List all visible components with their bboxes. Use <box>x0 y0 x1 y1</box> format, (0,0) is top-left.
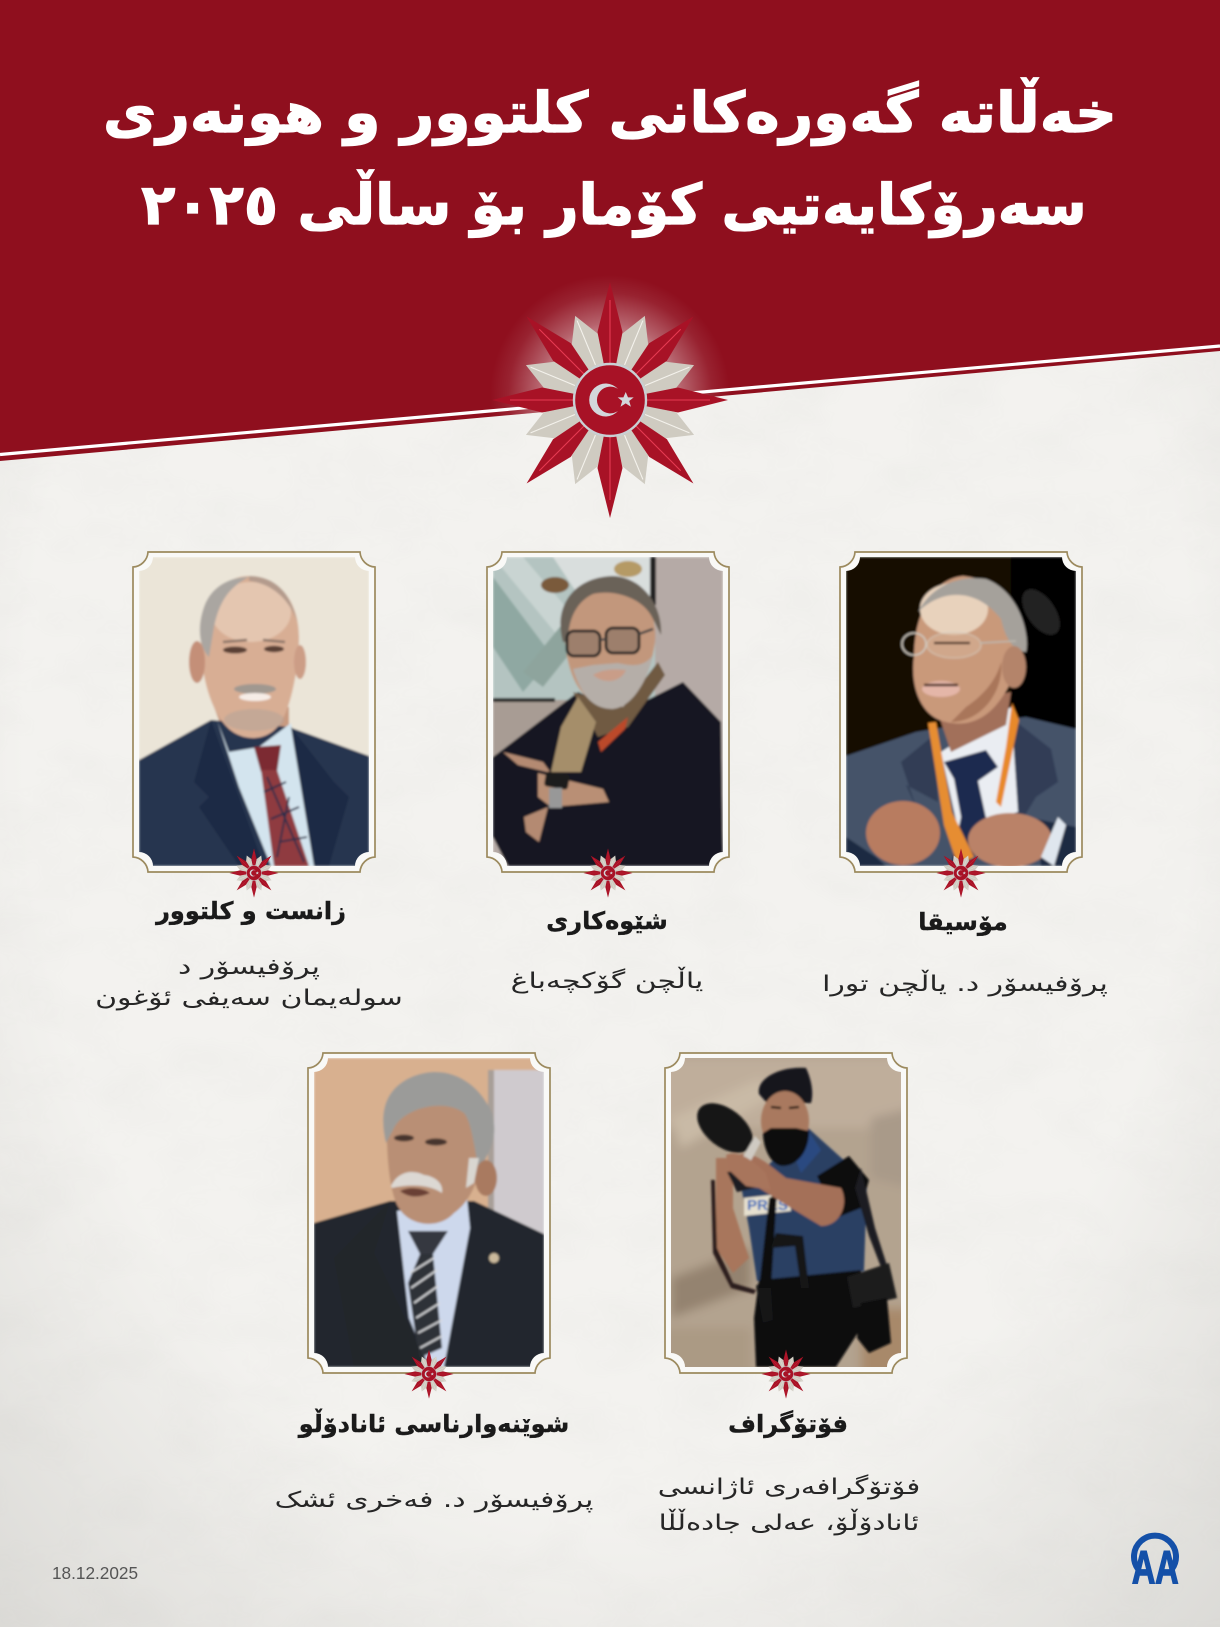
date: 18.12.2025 <box>52 1563 138 1583</box>
names: photography: فۆتۆگرافەری ئاژانسی <box>658 1475 920 1500</box>
panel: painting <box>238 551 730 994</box>
names: music: پرۆفیسۆر د. یاڵچن تورا <box>822 972 1108 997</box>
names: science and culture: سولەیمان سەیفی ئۆغون <box>95 986 403 1011</box>
title <box>103 77 1117 238</box>
names: archaeology: پرۆفیسۆر د. فەخری ئشک <box>275 1488 593 1513</box>
portrait frame: music <box>839 551 1083 898</box>
names: science and culture <box>95 955 403 1011</box>
heading: archaeology: شوێنەوارناسی ئانادۆڵو <box>299 1410 569 1438</box>
heading: photography: فۆتۆگراف <box>728 1410 848 1438</box>
heading: painting: شێوەکاری <box>546 907 668 935</box>
heading: science and culture: زانست و کلتوور <box>156 897 346 925</box>
icon: presidential sun emblem <box>492 283 728 518</box>
panel: photography <box>426 1052 1179 1570</box>
portrait frame: science and culture <box>132 551 376 898</box>
portrait frame: photography <box>664 1052 908 1398</box>
heading: music: مۆسیقا <box>918 908 1008 936</box>
names: photography: ئانادۆڵۆ، عەلی جادەڵڵا <box>659 1511 919 1536</box>
names: photography <box>658 1474 920 1536</box>
names: painting: یاڵچن گۆکچەباغ <box>511 969 703 994</box>
title line 1: خەڵاتە گەورەکانی کلتوور و هونەری <box>103 81 1117 146</box>
names: science and culture: پرۆفیسۆر د <box>178 955 320 980</box>
red banner <box>0 0 1220 461</box>
portrait frame: photography: PRES <box>747 1197 788 1214</box>
panel: music <box>238 551 1108 997</box>
panel: science and culture <box>95 551 403 1011</box>
portrait frame: archaeology <box>307 1052 551 1398</box>
panel: archaeology <box>275 1052 593 1513</box>
title line 2: سەرۆکایەتیی کۆمار بۆ ساڵی ٢٠٢٥ <box>141 173 1087 238</box>
portrait frame: painting <box>486 551 730 898</box>
